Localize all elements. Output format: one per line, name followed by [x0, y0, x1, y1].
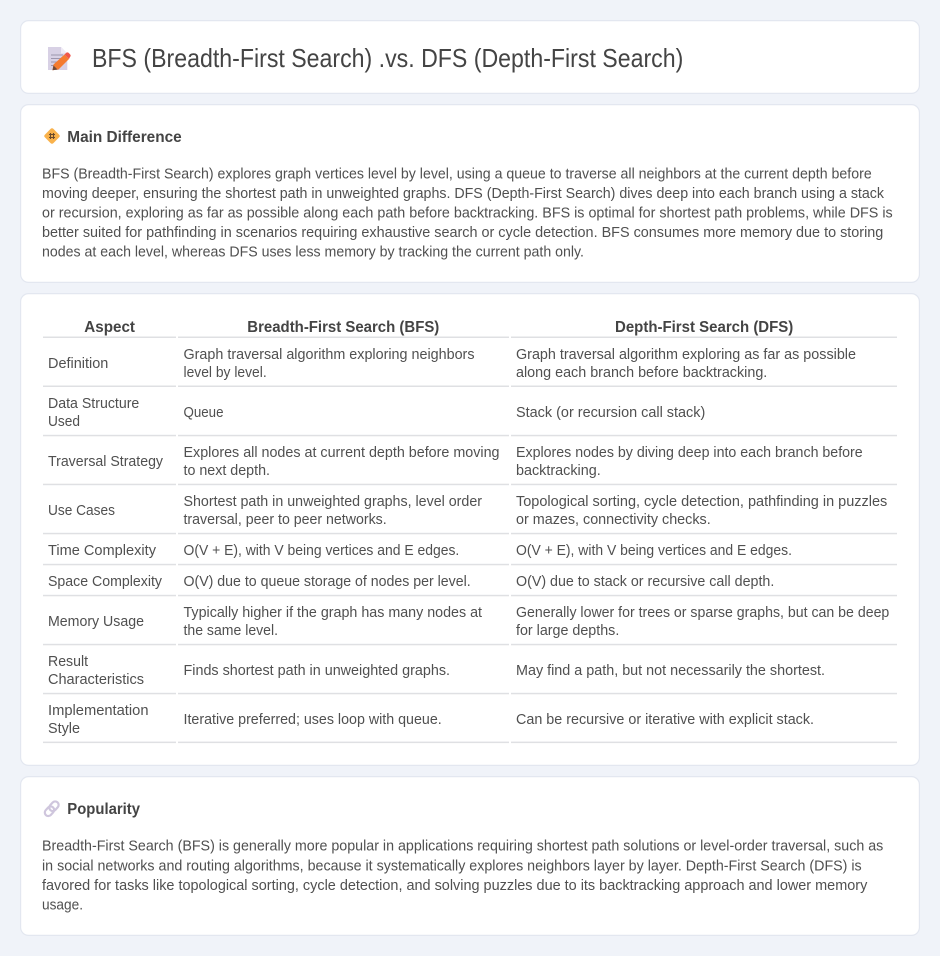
- text block: main difference paragraph: BFS (Breadth-First Search) explores graph vertices level by level, using a queue to traverse all neighbors at the current depth before: [42, 166, 872, 182]
- table row: Implementation Style: Iterative preferred; uses loop with queue.: [184, 712, 442, 728]
- title: BFS (Breadth-First Search) .vs. DFS (Depth-First Search): [92, 45, 683, 73]
- table row: Definition: along each branch before backtracking.: [516, 365, 767, 381]
- table row: Traversal Strategy: backtracking.: [516, 463, 601, 479]
- text block: popularity paragraph: in social networks and routing algorithms, because it systematically explores neighbors layer by layer. Depth-First Search (DFS) is: [42, 858, 862, 874]
- table row: Memory Usage: Generally lower for trees or sparse graphs, but can be deep: [516, 605, 889, 621]
- table row: Use Cases: or mazes, connectivity checks.: [516, 512, 711, 528]
- table row: Space Complexity: Space Complexity: [48, 574, 163, 590]
- text block: main difference paragraph: nodes at each level, whereas DFS uses less memory by tracking the current path only.: [42, 245, 584, 261]
- panel: main difference: [21, 105, 919, 282]
- text block: main difference paragraph: better suited for pathfinding in scenarios requiring exhaustive search or cycle detection. BFS consumes more memory due to storing: [42, 225, 883, 241]
- table row: Use Cases: [43, 494, 897, 534]
- table row: Traversal Strategy: Traversal Strategy: [48, 454, 164, 470]
- table row: Time Complexity: O(V + E), with V being vertices and E edges.: [184, 543, 459, 559]
- table row: Data Structure Used: Queue: [184, 405, 224, 421]
- table row: Definition: Definition: [48, 356, 108, 372]
- heading: Main Difference: Main Difference: [67, 129, 182, 146]
- table header row: Aspect: [84, 319, 136, 336]
- table row: Data Structure Used: Data Structure: [48, 396, 139, 412]
- table row: Result Characteristics: [43, 654, 897, 694]
- table row: Data Structure Used: Used: [48, 414, 80, 430]
- table row: Use Cases: Topological sorting, cycle detection, pathfinding in puzzles: [516, 494, 887, 510]
- table row: Definition: Graph traversal algorithm exploring as far as possible: [516, 347, 856, 363]
- table row: Memory Usage: [43, 605, 897, 645]
- table row: Traversal Strategy: [43, 445, 897, 485]
- panel: comparison table: [21, 294, 919, 765]
- table row: Traversal Strategy: to next depth.: [184, 463, 270, 479]
- text block: popularity paragraph: Breadth-First Search (BFS) is generally more popular in applications requiring shortest path solutions or level-order traversal, such as: [42, 839, 883, 855]
- text block: popularity paragraph: favored for tasks like topological sorting, cycle detection, and solving puzzles due to its backtracking approach and lower memory: [42, 878, 868, 894]
- icon: orange diamond: [44, 128, 60, 144]
- table row: Result Characteristics: Characteristics: [48, 672, 144, 688]
- table header row: Depth-First Search (DFS): [615, 319, 793, 336]
- table row: Use Cases: Use Cases: [48, 503, 115, 519]
- text block: main difference paragraph: moving deeper, ensuring the shortest path in unweighted graphs. DFS (Depth-First Search) dives deep into each branch using a stack: [42, 186, 885, 202]
- table row: Data Structure Used: Stack (or recursion call stack): [516, 405, 705, 421]
- table row: Space Complexity: O(V) due to queue storage of nodes per level.: [184, 574, 471, 590]
- table row: Traversal Strategy: Explores nodes by diving deep into each branch before: [516, 445, 863, 461]
- table row: Implementation Style: Can be recursive or iterative with explicit stack.: [516, 712, 814, 728]
- table row: Time Complexity: O(V + E), with V being vertices and E edges.: [516, 543, 792, 559]
- text block: main difference paragraph: [42, 166, 893, 261]
- table row: Data Structure Used: [43, 396, 897, 436]
- table row: Space Complexity: O(V) due to stack or recursive call depth.: [516, 574, 774, 590]
- table row: Definition: Graph traversal algorithm exploring neighbors: [184, 347, 474, 363]
- text block: popularity paragraph: usage.: [42, 898, 83, 914]
- panel: page header: [21, 21, 919, 93]
- text block: popularity paragraph: [42, 839, 883, 914]
- icon: chain link: [43, 800, 60, 817]
- table row: Memory Usage: the same level.: [184, 623, 278, 639]
- table row: Time Complexity: Time Complexity: [48, 543, 157, 559]
- table row: Use Cases: Shortest path in unweighted graphs, level order: [184, 494, 482, 510]
- table header row: [43, 319, 897, 338]
- table row: Result Characteristics: Finds shortest path in unweighted graphs.: [184, 663, 450, 679]
- table row: Implementation Style: Implementation: [48, 703, 148, 719]
- table row: Implementation Style: Style: [48, 721, 80, 737]
- table row: Space Complexity: [43, 574, 897, 596]
- table row: Memory Usage: for large depths.: [516, 623, 619, 639]
- table row: Memory Usage: Typically higher if the graph has many nodes at: [184, 605, 482, 621]
- text block: main difference paragraph: or recursion, exploring as far as possible along each path before backtracking. BFS is optimal for shortest path problems, while DFS is: [42, 206, 893, 222]
- table row: Definition: level by level.: [184, 365, 267, 381]
- table row: Result Characteristics: May find a path, but not necessarily the shortest.: [516, 663, 825, 679]
- table header row: Breadth-First Search (BFS): [247, 319, 439, 336]
- table row: Use Cases: traversal, peer to peer networks.: [184, 512, 387, 528]
- table row: Definition: [43, 347, 897, 387]
- icon: document with pencil: [48, 47, 71, 70]
- table row: Memory Usage: Memory Usage: [48, 614, 144, 630]
- table row: Traversal Strategy: Explores all nodes at current depth before moving: [184, 445, 500, 461]
- table row: Time Complexity: [43, 543, 897, 565]
- panel: popularity: [21, 777, 919, 935]
- heading: Popularity: Popularity: [67, 801, 140, 818]
- table row: Implementation Style: [43, 703, 897, 743]
- table row: Result Characteristics: Result: [48, 654, 88, 670]
